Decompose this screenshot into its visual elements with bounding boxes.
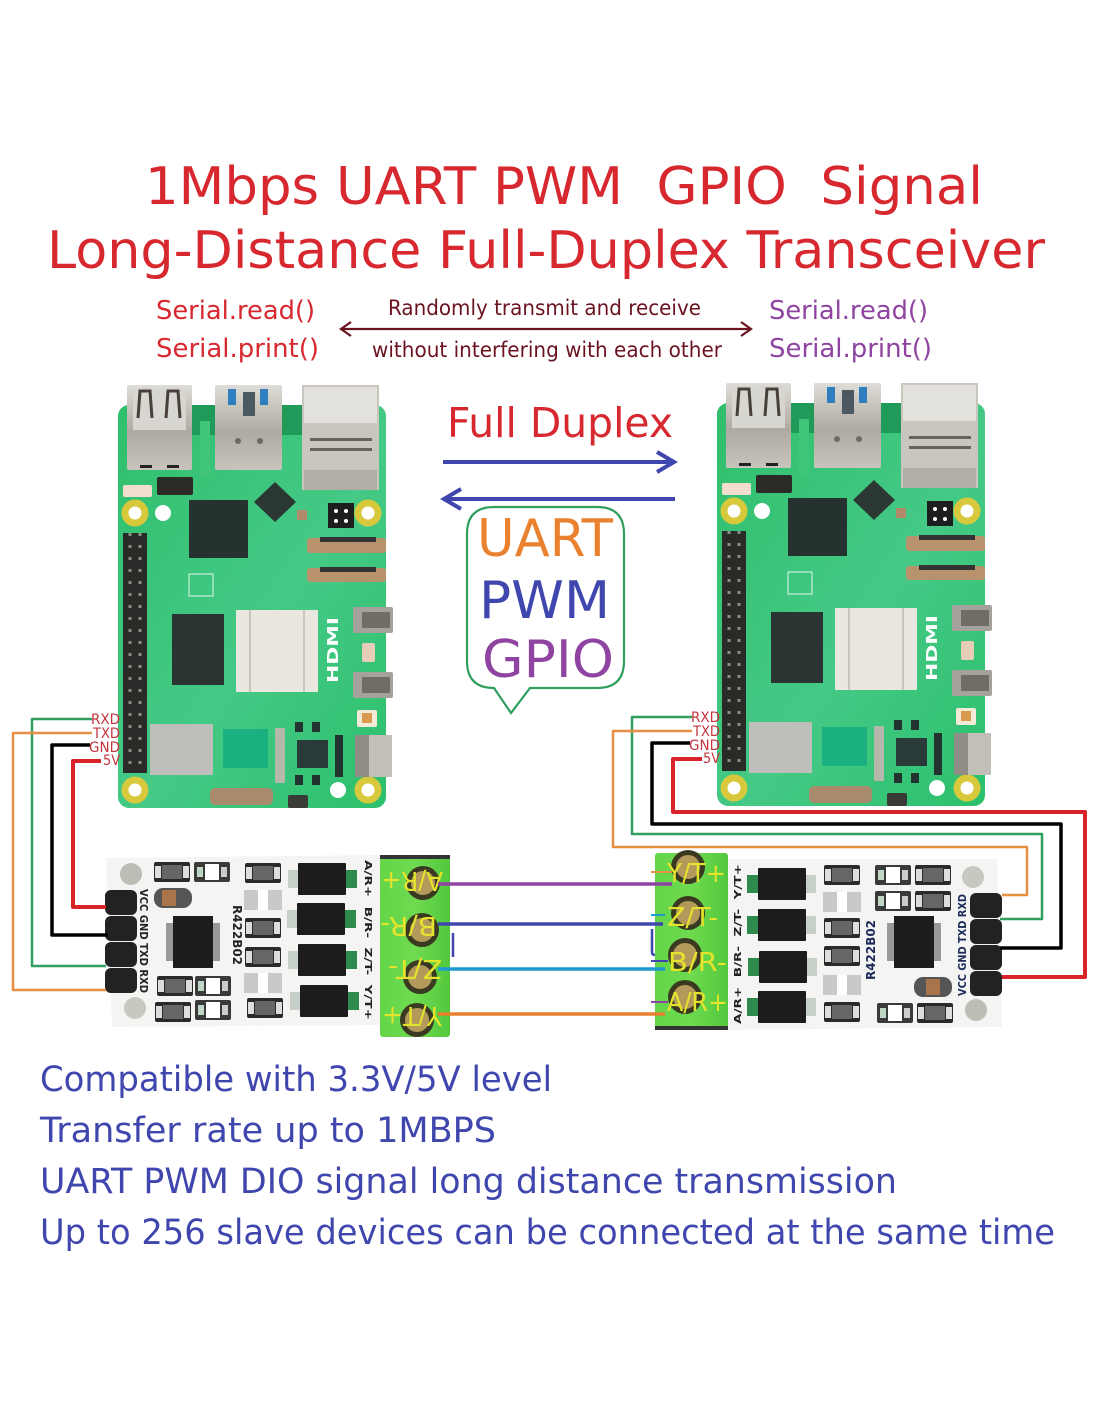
feature list: Transfer rate up to 1MBPS [39,1111,496,1151]
feature list: UART PWM DIO signal long distance transmission [40,1162,897,1202]
title [47,157,1046,281]
serial calls: right device [769,296,932,364]
heading: full duplex: Full Duplex [447,399,673,447]
transceiver module: right: A/R+ [667,988,728,1018]
duplex caption with double arrow: without interfering with each other [372,338,722,362]
feature list: Compatible with 3.3V/5V level [40,1060,552,1100]
speech bubble: protocols [467,507,624,713]
serial calls: right device: Serial.read() [769,296,928,326]
transceiver module: left: B/R- [380,910,437,940]
raspberry pi board: right [717,383,992,806]
title: Long-Distance Full-Duplex Transceiver [47,221,1046,281]
duplex caption with double arrow: Randomly transmit and receive [388,296,701,320]
serial calls: left device [156,296,319,364]
serial calls: left device: Serial.read() [156,296,315,326]
transceiver module: left: Z/T- [388,953,442,983]
differential pair wiring between modules [438,872,672,1014]
pin labels: right pi: TXD [692,724,720,740]
serial calls: right device: Serial.print() [769,334,932,364]
pin labels: left pi: 5V [103,753,120,769]
pin labels: right pi: 5V [703,751,720,767]
pin labels: left pi: GND [89,740,120,756]
transceiver module: left [105,855,450,1037]
transceiver module: right: VCC GND TXD RXD [956,894,969,996]
pin labels: right pi [689,710,720,767]
transceiver module: left: A/R+ B/R- Z/T- Y/T+ [362,860,373,1020]
transceiver module: left: VCC GND TXD RXD [137,889,150,993]
pin labels: left pi: RXD [91,712,120,728]
serial calls: left device: Serial.print() [156,334,319,364]
feature list: Up to 256 slave devices can be connected at the same time [40,1213,1055,1253]
transceiver module: left: A/R+ [381,865,443,895]
raspberry pi board: left [118,385,393,808]
arrow: transmit left [443,489,675,509]
transceiver module: right: Z/T- [667,903,718,933]
speech bubble: protocols: GPIO [482,630,614,690]
pin labels: left pi [89,712,120,769]
feature list [39,1060,1055,1253]
raspberry pi board: right: HDMI [923,615,941,681]
duplex caption with double arrow [341,296,751,362]
transceiver module: right: Y/T+ [666,859,726,889]
pin labels: right pi: RXD [691,710,720,726]
transceiver module: right [655,850,1002,1030]
pin labels: right pi: GND [689,738,720,754]
speech bubble: protocols: PWM [479,571,610,631]
pin labels: left pi: TXD [92,726,120,742]
wiring: left pi to left module [13,719,108,990]
raspberry pi board: left: HDMI [324,617,342,683]
transceiver module: left: Y/T+ [382,1000,443,1030]
transceiver module: right: A/R+ B/R- Z/T- Y/T+ [733,864,744,1024]
wiring: right pi to right module [613,717,1085,977]
speech bubble: protocols: UART [477,509,613,569]
title: 1Mbps UART PWM GPIO Signal [145,157,983,217]
arrow: transmit right [443,452,675,472]
transceiver module: right: B/R- [668,948,727,978]
transceiver module: right: R422B02 [864,920,878,980]
transceiver module: left: R422B02 [230,905,244,965]
